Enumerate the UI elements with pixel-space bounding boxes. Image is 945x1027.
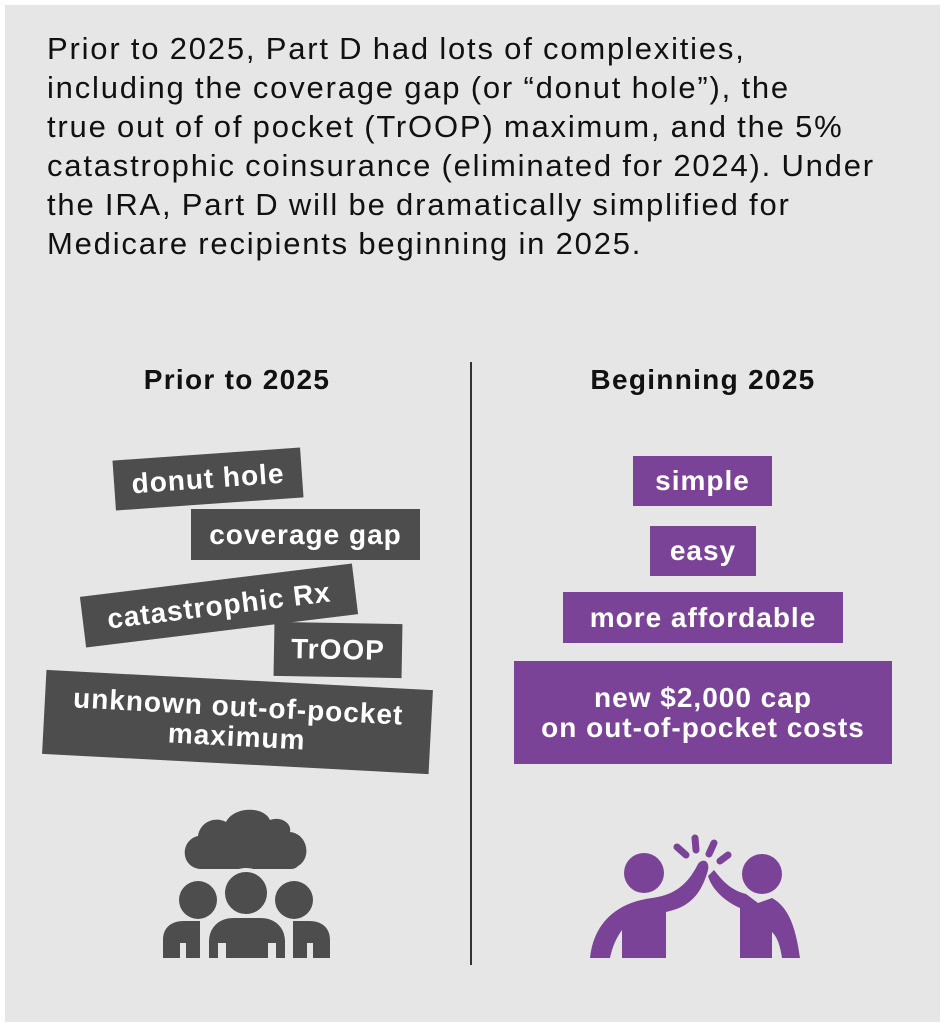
tag: more affordable (563, 592, 843, 643)
tag: simple (633, 456, 772, 506)
tag: unknown out-of-pocket maximum (42, 670, 433, 774)
intro text: catastrophic coinsurance (eliminated for 2024). Under (47, 148, 875, 183)
intro text: true out of of pocket (TrOOP) maximum, and the 5% (47, 109, 844, 144)
icon: high five (590, 834, 800, 958)
tag: easy: easy (670, 535, 736, 566)
heading: prior to 2025: Prior to 2025 (144, 364, 330, 395)
tag: unknown out-of-pocket maximum: maximum (167, 717, 306, 756)
tag: unknown out-of-pocket maximum: unknown out-of-pocket (72, 682, 404, 731)
intro text (47, 31, 875, 261)
tag: more affordable: more affordable (590, 602, 816, 632)
tag: new cap: new $2,000 cap (594, 682, 812, 712)
intro text: Medicare recipients beginning in 2025. (47, 226, 642, 261)
intro text: including the coverage gap (or “donut hole”), the (47, 70, 790, 105)
tag: donut hole: donut hole (131, 458, 285, 499)
tag: coverage gap (191, 509, 420, 560)
tag: TrOOP (274, 622, 402, 678)
tag: easy (650, 526, 756, 576)
tag: new cap (514, 661, 892, 764)
icon: cloud over people (163, 810, 330, 958)
tag: new cap: on out-of-pocket costs (541, 712, 865, 742)
tag: donut hole (112, 448, 304, 510)
tag: coverage gap: coverage gap (209, 518, 402, 550)
intro text: Prior to 2025, Part D had lots of complexities, (47, 31, 746, 66)
tag: TrOOP: TrOOP (291, 633, 385, 666)
heading: beginning 2025: Beginning 2025 (590, 364, 816, 395)
tag: catastrophic Rx (80, 563, 358, 648)
tag: catastrophic Rx: catastrophic Rx (105, 576, 333, 634)
intro text: the IRA, Part D will be dramatically simplified for (47, 187, 791, 222)
tag: simple: simple (655, 465, 750, 496)
